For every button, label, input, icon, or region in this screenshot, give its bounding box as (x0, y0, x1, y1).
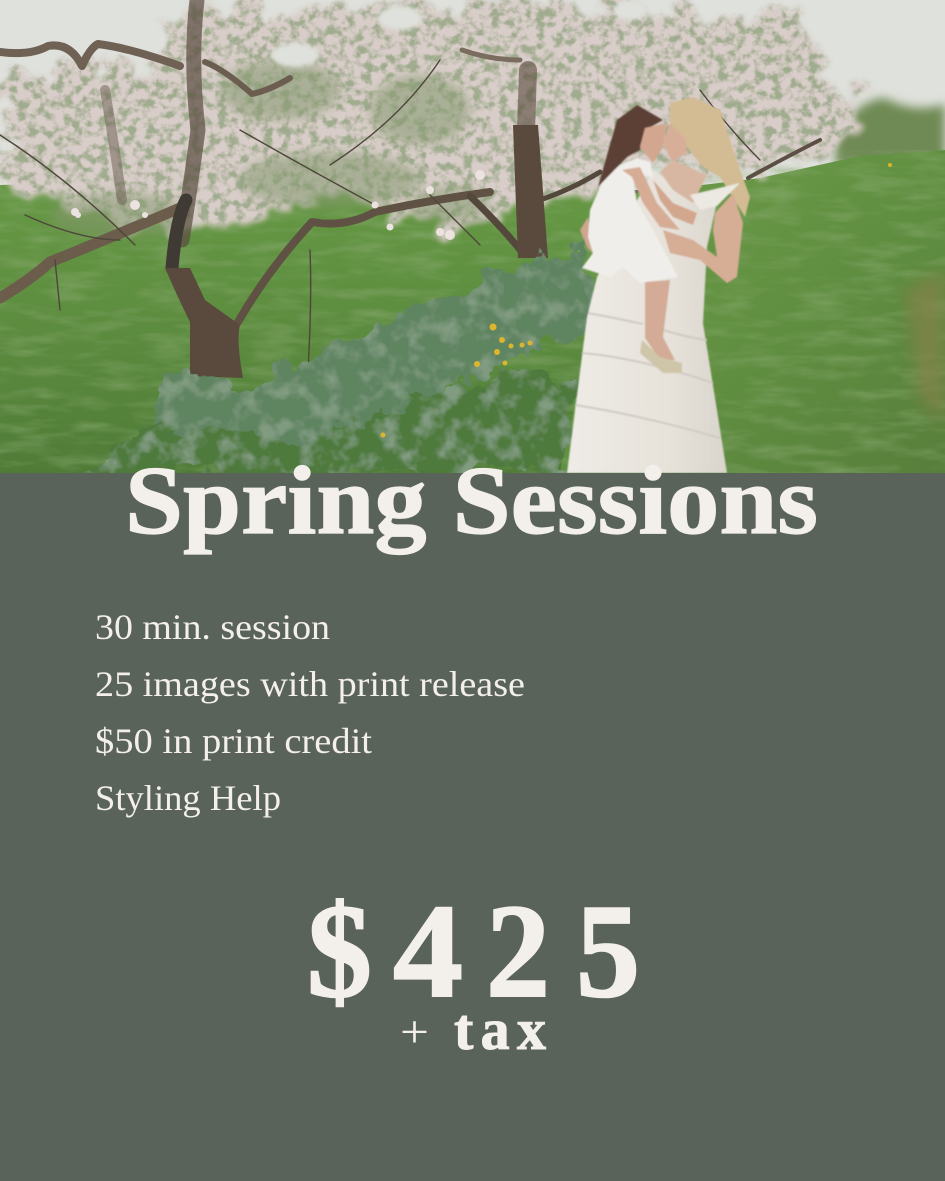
green foliage in canopy (50, 60, 490, 237)
mother chest (660, 160, 707, 203)
sky gaps (120, 0, 645, 70)
feature: print credit: $50 in print credit (95, 721, 372, 761)
grass field right (560, 150, 945, 473)
upper trunk left tree (182, 0, 198, 240)
dress tiers (575, 313, 720, 438)
mother hair (670, 97, 750, 217)
mother dress (567, 170, 740, 473)
title: Spring Sessions (125, 447, 818, 555)
child face (640, 123, 667, 163)
left tree trunk (165, 268, 243, 378)
mother and daughter (567, 97, 750, 473)
child arm (622, 167, 680, 230)
blossom clusters (71, 170, 485, 240)
feature list (95, 607, 525, 818)
right limb (238, 192, 490, 322)
upper main branch (0, 44, 180, 66)
second tree trunk (513, 125, 548, 258)
child shoe (640, 340, 682, 373)
mother left arm (579, 217, 594, 254)
dress ruffle strap (690, 183, 740, 210)
grey green leaves (150, 245, 600, 473)
price: 2 (486, 877, 550, 1025)
blossom canopy (0, 0, 862, 235)
distant treeline (835, 98, 945, 165)
low dark undergrowth (80, 365, 575, 473)
price: 5 (576, 877, 640, 1025)
grass field left (0, 165, 620, 473)
sky (0, 0, 945, 190)
grass texture (0, 150, 945, 473)
tax note (400, 997, 546, 1062)
feature: styling: Styling Help (95, 778, 281, 818)
dry grass patch (905, 270, 945, 425)
price: 4 (393, 877, 463, 1025)
child hair (598, 105, 663, 187)
twigs (0, 60, 760, 370)
lower left limb (0, 208, 180, 298)
child hand (653, 180, 697, 225)
feature: images: 25 images with print release (95, 664, 525, 704)
foliage bed (80, 245, 600, 473)
photo: mother and daughter in apple orchard (0, 0, 945, 473)
tax word: tax (454, 997, 546, 1062)
child dress (582, 158, 678, 283)
plus sign: + (400, 1006, 429, 1057)
feature: session length: 30 min. session (95, 607, 330, 647)
tree branches (0, 0, 820, 370)
mother face (663, 123, 687, 162)
second tree upper trunk (526, 70, 528, 130)
yellow dandelions (380, 163, 892, 438)
price: $ (307, 877, 372, 1025)
child leg (645, 280, 675, 360)
second tree limbs (470, 196, 522, 252)
background tree trunk (105, 90, 122, 200)
mother right arm (663, 193, 743, 283)
price (307, 877, 640, 1025)
broken stub (172, 200, 186, 268)
